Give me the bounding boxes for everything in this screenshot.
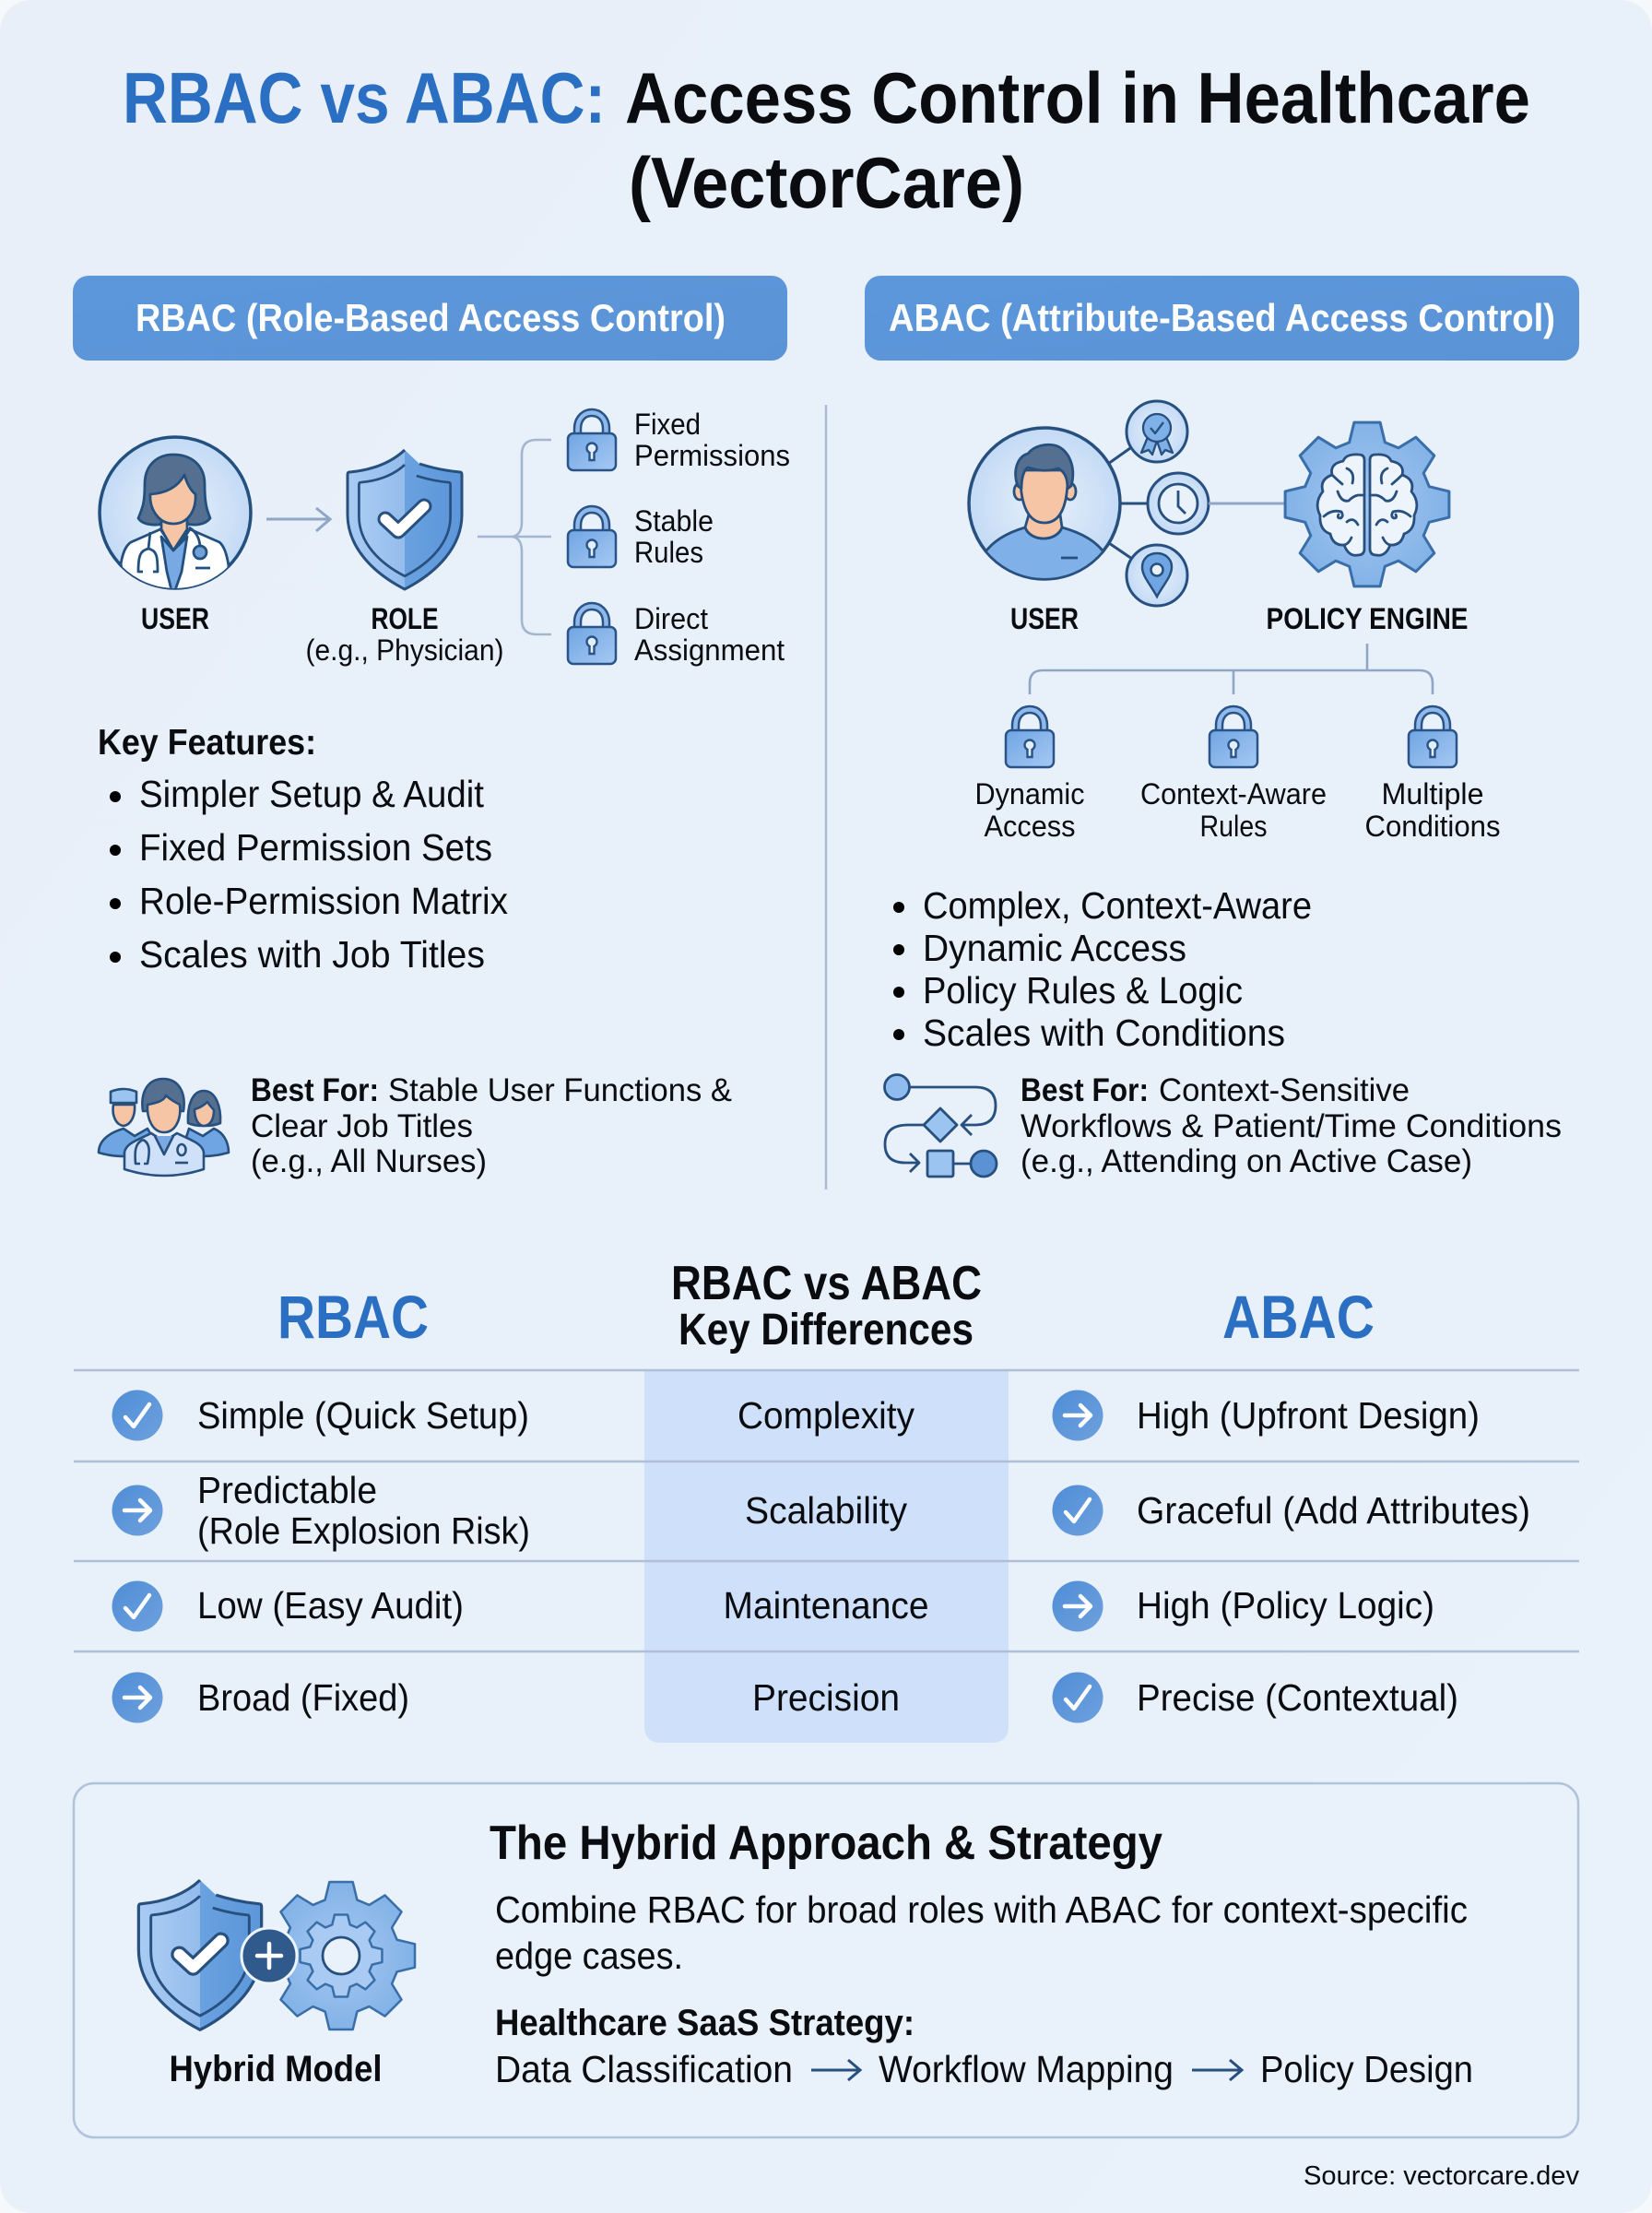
text block: hybrid description: edge cases. xyxy=(495,1935,683,1977)
text block: RBAC best for: Clear Job Titles xyxy=(251,1108,473,1144)
outcome: context-aware rules: Context-Aware xyxy=(1140,777,1327,811)
text block: RBAC key features: Scales with Job Titles xyxy=(139,933,485,976)
row: maintenance: Maintenance xyxy=(723,1584,929,1627)
label: ROLE: ROLE xyxy=(371,602,439,635)
outcome: multiple conditions: Conditions xyxy=(1364,810,1501,843)
row: complexity: High (Upfront Design) xyxy=(1137,1394,1480,1437)
strategy flow xyxy=(495,2048,1473,2090)
heading: RBAC banner: RBAC (Role-Based Access Control) xyxy=(136,296,726,339)
heading: ABAC column: ABAC xyxy=(1222,1283,1375,1351)
title xyxy=(123,57,1530,223)
title: Access Control in Healthcare xyxy=(625,57,1530,138)
permission: stable: Stable xyxy=(634,504,714,538)
heading: RBAC column: RBAC xyxy=(277,1283,429,1351)
outcome: multiple conditions xyxy=(1364,706,1501,843)
label: ROLE: (e.g., Physician) xyxy=(306,633,503,667)
outcome: context-aware rules xyxy=(1140,706,1327,843)
permission: fixed: Permissions xyxy=(634,439,790,472)
strategy flow: Data Classification xyxy=(495,2048,793,2090)
icon: role shield xyxy=(348,450,462,589)
row: precision: Broad (Fixed) xyxy=(197,1676,409,1719)
icon: medical team xyxy=(99,1079,229,1176)
text block: ABAC best for: Workflows & Patient/Time Conditions xyxy=(1021,1108,1562,1144)
text block: RBAC best for: Stable User Functions & xyxy=(388,1072,732,1108)
icon: credential badge xyxy=(1127,401,1187,462)
permission: direct: Assignment xyxy=(634,633,785,667)
outcome: dynamic access: Access xyxy=(985,810,1075,843)
text block: RBAC key features: Simpler Setup & Audit xyxy=(139,773,485,815)
text block: RBAC best for xyxy=(251,1072,732,1179)
row: scalability: Predictable xyxy=(197,1469,377,1511)
icon: policy engine gear with brain xyxy=(1285,422,1449,586)
row: complexity xyxy=(112,1391,1480,1440)
row: scalability: Scalability xyxy=(745,1489,907,1532)
text block: RBAC best for: (e.g., All Nurses) xyxy=(251,1143,487,1179)
text block: RBAC key features: Role-Permission Matrix xyxy=(139,880,508,922)
panel: RBAC diagram xyxy=(100,408,790,667)
permission: stable: Rules xyxy=(634,536,703,569)
arrow: user to role xyxy=(266,508,330,531)
text block: ABAC best for: (e.g., Attending on Active Case) xyxy=(1021,1143,1472,1179)
permission: direct xyxy=(568,602,785,667)
row: precision: Precision xyxy=(752,1676,900,1719)
row: scalability: (Role Explosion Risk) xyxy=(197,1509,530,1552)
outcome: dynamic access: Dynamic xyxy=(975,777,1084,811)
text block: ABAC best for: Context-Sensitive xyxy=(1159,1072,1410,1108)
text block: hybrid description: Combine RBAC for broad roles with ABAC for context-specific xyxy=(495,1888,1468,1931)
heading: ABAC banner: ABAC (Attribute-Based Access Control) xyxy=(889,296,1555,339)
icon: doctor user xyxy=(100,437,251,595)
outcome: context-aware rules: Rules xyxy=(1200,810,1267,843)
icon: hybrid model xyxy=(138,1880,415,2030)
connector: attributes to engine xyxy=(1209,502,1286,505)
title: (VectorCare) xyxy=(629,142,1024,223)
text block: ABAC features: Dynamic Access xyxy=(923,927,1186,969)
icon: workflow xyxy=(885,1075,997,1177)
label: ROLE xyxy=(306,602,503,667)
label: USER: USER xyxy=(141,602,209,635)
heading: ABAC banner xyxy=(865,276,1579,361)
text block: ABAC best for: Best For: xyxy=(1021,1072,1149,1108)
permission: stable xyxy=(568,504,714,569)
text block: RBAC key features: Key Features: xyxy=(98,723,316,763)
outcome: dynamic access xyxy=(975,706,1084,843)
text block: ABAC features xyxy=(893,884,1312,1054)
heading: hybrid approach: The Hybrid Approach & Strategy xyxy=(490,1817,1162,1870)
row: scalability: Graceful (Add Attributes) xyxy=(1137,1489,1530,1532)
text block: ABAC features: Complex, Context-Aware xyxy=(923,884,1312,927)
source note: Source: vectorcare.dev xyxy=(1304,2161,1579,2191)
permission: fixed: Fixed xyxy=(634,408,701,441)
heading: saas strategy: Healthcare SaaS Strategy: xyxy=(495,2003,914,2043)
strategy flow: Workflow Mapping xyxy=(879,2048,1174,2090)
panel: hybrid approach xyxy=(74,1783,1578,2137)
permission: fixed xyxy=(568,408,790,472)
row: precision xyxy=(112,1673,1458,1722)
highlighted middle column xyxy=(644,1369,1009,1743)
text block: RBAC key features: Fixed Permission Sets xyxy=(139,826,492,869)
bracket connector xyxy=(478,440,551,634)
heading: key differences: Key Differences xyxy=(678,1306,974,1355)
label: POLICY ENGINE: POLICY ENGINE xyxy=(1267,602,1468,635)
title: RBAC vs ABAC: xyxy=(123,57,606,138)
text block: ABAC features: Scales with Conditions xyxy=(923,1012,1285,1054)
tree connector xyxy=(1030,644,1433,694)
panel: ABAC diagram xyxy=(969,401,1501,843)
row: maintenance: High (Policy Logic) xyxy=(1137,1584,1434,1627)
row: precision: Precise (Contextual) xyxy=(1137,1676,1458,1719)
row: complexity: Complexity xyxy=(738,1394,914,1437)
attribute connectors xyxy=(1108,448,1149,559)
heading: RBAC banner xyxy=(73,276,787,361)
row: maintenance: Low (Easy Audit) xyxy=(197,1584,464,1627)
icon: user xyxy=(969,428,1120,590)
text block: hybrid description xyxy=(495,1888,1468,1977)
heading: key differences: RBAC vs ABAC xyxy=(671,1257,982,1310)
text block: ABAC features: Policy Rules & Logic xyxy=(923,969,1243,1012)
row: complexity: Simple (Quick Setup) xyxy=(197,1394,529,1437)
outcome: multiple conditions: Multiple xyxy=(1381,777,1484,811)
strategy flow: Policy Design xyxy=(1260,2048,1473,2090)
label: USER: USER xyxy=(1010,602,1079,635)
heading: key differences xyxy=(671,1257,982,1355)
permission: direct: Direct xyxy=(634,602,708,635)
row: scalability xyxy=(112,1469,1530,1552)
icon: location pin xyxy=(1127,545,1187,606)
text block: RBAC best for: Best For: xyxy=(251,1072,379,1108)
row: maintenance xyxy=(112,1580,1434,1632)
text block: RBAC key features xyxy=(98,723,508,976)
label: hybrid model: Hybrid Model xyxy=(170,2049,382,2089)
icon: clock xyxy=(1148,473,1209,534)
text block: ABAC best for xyxy=(1021,1072,1562,1179)
comparison table xyxy=(74,1257,1579,1743)
